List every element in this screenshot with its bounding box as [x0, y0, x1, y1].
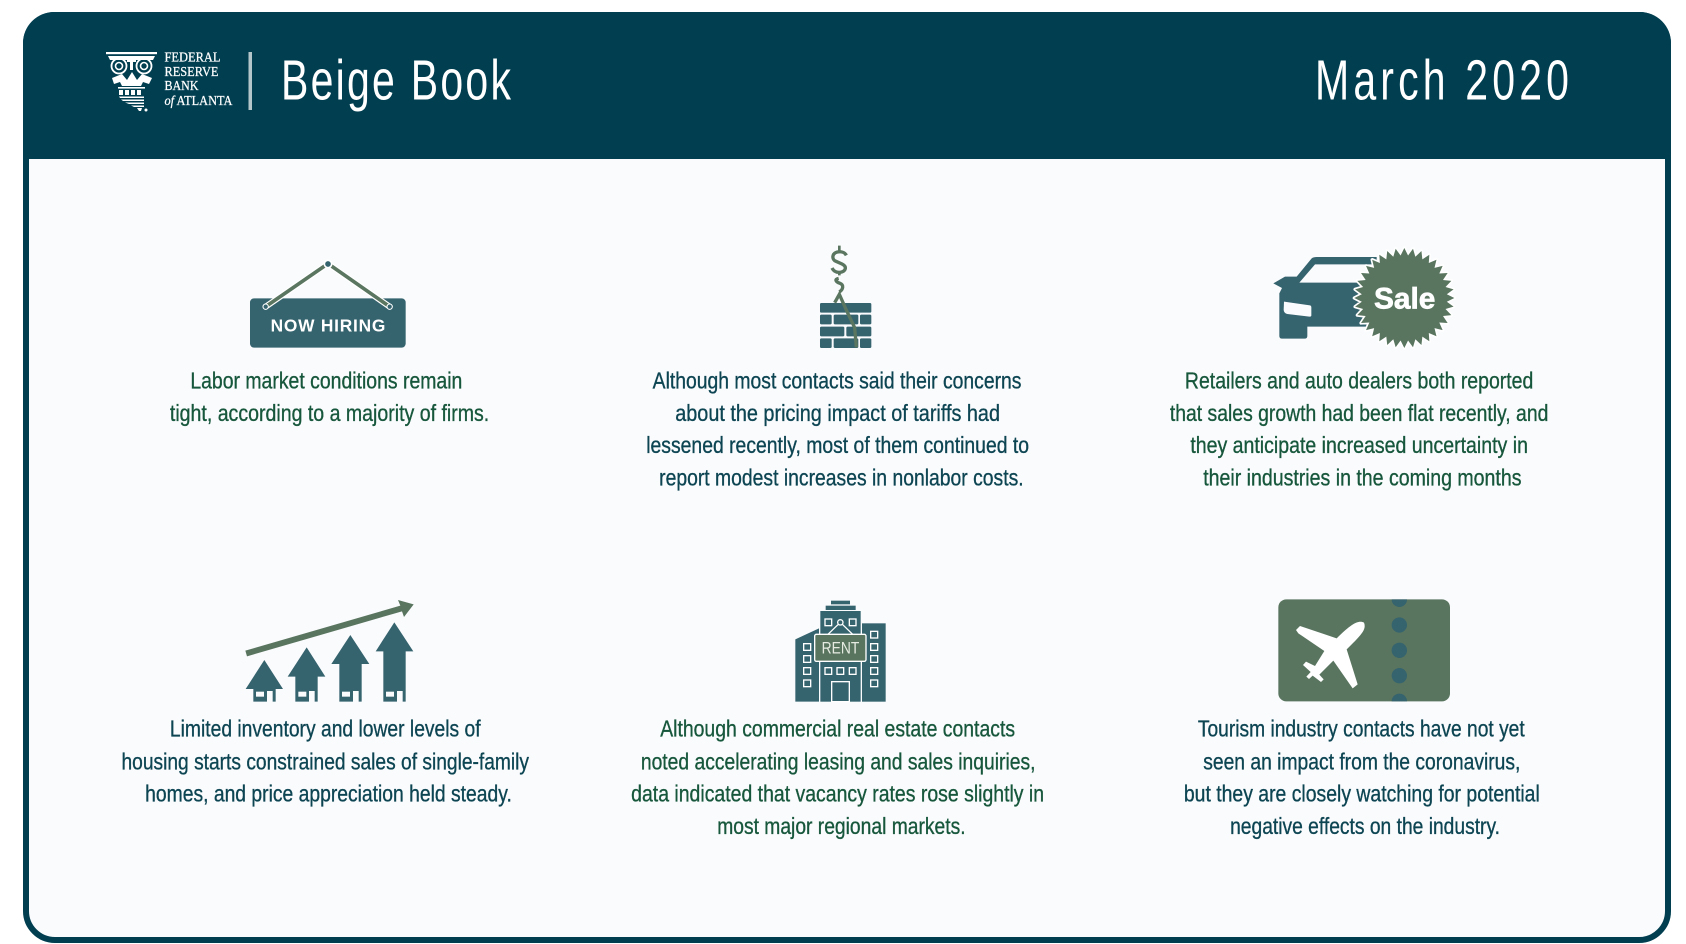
logo wordmark: [164, 50, 233, 108]
text: tariffs and nonlabor costs: [646, 368, 1029, 490]
text: labor market conditions: tight, according to a majority of firms.: [170, 400, 489, 426]
text: retailers and auto dealers: their industries in the coming months: [1203, 464, 1521, 490]
logo wordmark: FEDERAL: [164, 50, 220, 64]
icon: car with sale badge: Sale: [1374, 283, 1435, 316]
text: vacancy rates: data indicated that vacancy rates rose slightly in: [631, 781, 1044, 807]
text: retailers and auto dealers: that sales growth had been flat recently, and: [1170, 400, 1548, 426]
text: retailers and auto dealers: [1170, 368, 1548, 490]
icon: now hiring sign: [250, 260, 406, 348]
text: tourism and coronavirus: seen an impact from the coronavirus,: [1203, 748, 1520, 774]
panel: commercial real estate: [631, 601, 1044, 839]
text: housing inventory: Limited inventory and lower levels of: [170, 716, 481, 742]
icon: brick wall with dollar sign: [820, 246, 871, 348]
heading: Beige Book: Beige Book: [281, 48, 511, 112]
icon: building with rent sign: [795, 601, 886, 702]
logo: Federal Reserve Bank of Atlanta: [106, 50, 233, 112]
text: vacancy rates: most major regional markets.: [717, 813, 966, 839]
text: vacancy rates: [631, 716, 1044, 839]
panel: pricing and tariffs: [646, 246, 1029, 490]
text: labor market conditions: Labor market conditions remain: [190, 368, 462, 394]
logo wordmark: RESERVE: [164, 64, 218, 79]
icon: now hiring sign: NOW HIRING: [271, 315, 385, 335]
heading: March 2020: March 2020: [1315, 48, 1569, 112]
panel: tourism: [1184, 599, 1540, 839]
logo wordmark: BANK: [164, 78, 199, 93]
panel: housing: [122, 600, 529, 807]
text: tourism and coronavirus: but they are closely watching for potential: [1184, 781, 1540, 807]
text: tourism and coronavirus: Tourism industry contacts have not yet: [1198, 716, 1525, 742]
panel: labor market: [170, 260, 489, 426]
text: housing inventory: housing starts constrained sales of single-family: [122, 748, 529, 774]
logo divider: [248, 52, 252, 110]
icon: rising houses with arrow: [245, 600, 414, 702]
text: housing inventory: homes, and price appreciation held steady.: [145, 781, 512, 807]
icon: plane ticket: [1278, 599, 1450, 701]
text: tariffs and nonlabor costs: lessened recently, most of them continued to: [646, 432, 1029, 458]
text: vacancy rates: noted accelerating leasing and sales inquiries,: [641, 748, 1035, 774]
panel: retail and auto sales: [1170, 248, 1548, 490]
text: labor market conditions: [170, 368, 489, 426]
header band: [23, 12, 1671, 159]
text: tourism and coronavirus: [1184, 716, 1540, 839]
text: tariffs and nonlabor costs: report modest increases in nonlabor costs.: [659, 464, 1024, 490]
text: tourism and coronavirus: negative effects on the industry.: [1230, 813, 1500, 839]
text: tariffs and nonlabor costs: Although most contacts said their concerns: [653, 368, 1021, 394]
text: housing inventory: [122, 716, 529, 807]
logo wordmark: of ATLANTA: [164, 93, 233, 108]
text: tariffs and nonlabor costs: about the pricing impact of tariffs had: [675, 400, 1000, 426]
icon: car with sale badge: [1273, 248, 1454, 348]
icon: building with rent sign: RENT: [822, 638, 859, 657]
text: retailers and auto dealers: Retailers and auto dealers both reported: [1185, 368, 1533, 394]
text: retailers and auto dealers: they anticipate increased uncertainty in: [1190, 432, 1528, 458]
text: vacancy rates: Although commercial real estate contacts: [660, 716, 1015, 742]
